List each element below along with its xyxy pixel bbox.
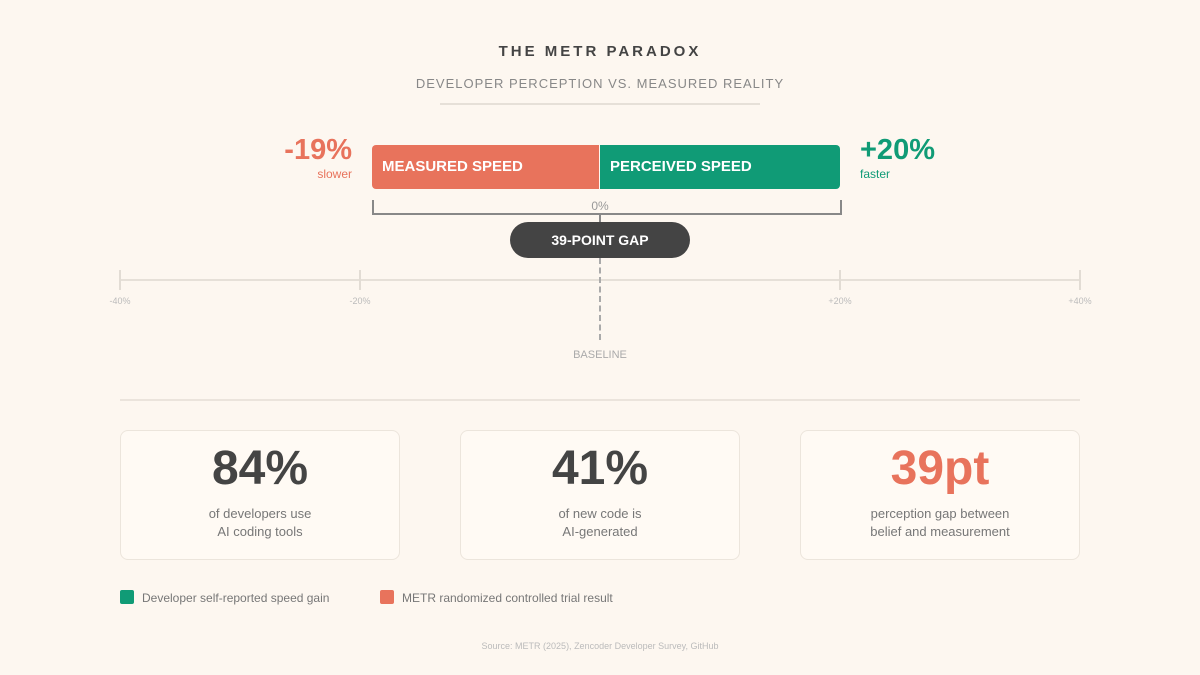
card: 39pt: 39pt <box>891 442 989 495</box>
gap pill <box>510 222 690 258</box>
card: 41%: AI-generated <box>562 524 638 539</box>
label: -19% slower: -19% <box>284 134 352 166</box>
card: 41%: 41% <box>552 442 648 495</box>
legend <box>120 590 613 605</box>
card: 39pt <box>800 430 1080 560</box>
card: 41% <box>460 430 740 560</box>
card: 39pt: belief and measurement <box>870 524 1010 539</box>
card: 84%: 84% <box>212 442 308 495</box>
label: +20% faster: faster <box>860 167 890 181</box>
card: 41%: of new code is <box>558 506 642 521</box>
legend: METR randomized controlled trial result <box>402 591 613 605</box>
subtitle: DEVELOPER PERCEPTION VS. MEASURED REALITY <box>416 76 784 91</box>
bar: measured speed: MEASURED SPEED <box>382 158 523 175</box>
bar: measured speed <box>372 145 599 189</box>
baseline label: BASELINE <box>573 349 627 361</box>
gap pill: 39-POINT GAP <box>551 232 649 248</box>
text: +20% <box>828 296 852 306</box>
source: Source: METR (2025), Zencoder Developer Survey, GitHub <box>482 641 718 651</box>
label: -19% slower <box>284 134 352 181</box>
card: 84%: of developers use <box>209 506 311 521</box>
label: -19% slower: slower <box>317 167 352 181</box>
label: +20% faster <box>860 134 935 181</box>
axis <box>120 279 1080 281</box>
label: +20% faster: +20% <box>860 134 935 166</box>
bracket <box>372 200 842 215</box>
legend: Developer self-reported speed gain <box>142 591 329 605</box>
text: -20% <box>349 296 370 306</box>
text: 0% <box>591 199 609 213</box>
card: 39pt: perception gap between <box>871 506 1009 521</box>
bar: perceived speed <box>600 145 840 189</box>
text: -40% <box>109 296 130 306</box>
text: +40% <box>1068 296 1092 306</box>
baseline dashed line <box>599 258 601 340</box>
title: THE METR PARADOX <box>499 43 701 60</box>
bar: perceived speed: PERCEIVED SPEED <box>610 158 752 175</box>
card: 84%: AI coding tools <box>217 524 303 539</box>
card: 84% <box>120 430 400 560</box>
